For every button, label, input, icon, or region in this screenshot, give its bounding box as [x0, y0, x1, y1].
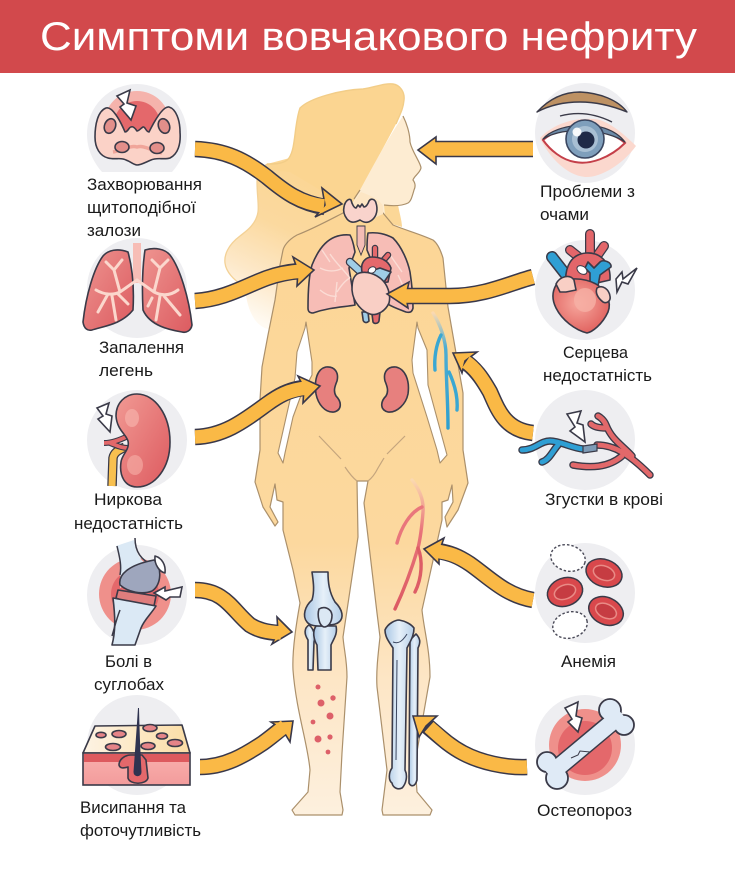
- arrow: to lungs: [195, 257, 314, 301]
- icon: lungs: [83, 238, 192, 338]
- torso, arms and legs: [255, 212, 468, 815]
- light flowing hair: [225, 150, 362, 329]
- label: blood clots: Згустки в крові: [545, 491, 663, 509]
- arrow: to thyroid: [195, 149, 342, 217]
- label: lung inflammation: легень: [99, 362, 153, 380]
- face: [345, 116, 421, 216]
- label: eye problems: Проблеми з: [540, 183, 635, 201]
- hair behind the neck: [384, 205, 402, 227]
- arrow: to arm vein: [453, 352, 533, 433]
- icon: thyroid disease: [87, 84, 187, 172]
- label: rash and photosensitivity: Висипання та: [80, 799, 187, 817]
- label: joint pain: суглобах: [94, 676, 165, 694]
- arrow: to heart: [387, 277, 533, 308]
- arrow: to knee: [195, 590, 292, 644]
- icon: anemia: [535, 541, 635, 643]
- organ: kidneys: [315, 367, 408, 412]
- label: thyroid disease: [87, 176, 202, 240]
- organ: trachea: [357, 226, 365, 255]
- label: thyroid disease: Захворювання: [87, 176, 202, 194]
- central body figure: [225, 84, 468, 815]
- label: eye problems: очами: [540, 206, 589, 224]
- label: osteoporosis: Остеопороз: [537, 802, 632, 820]
- bones: knee: [305, 572, 342, 670]
- label: rash and photosensitivity: [80, 799, 201, 840]
- icon: osteoporosis: [535, 695, 635, 795]
- label: rash and photosensitivity: фоточутливість: [80, 822, 201, 840]
- organ: heart: [350, 248, 391, 323]
- label: kidney failure: недостатність: [74, 515, 183, 533]
- neck cover: [346, 192, 383, 220]
- label: heart failure: Серцева: [563, 344, 629, 362]
- rash spots: [311, 684, 336, 754]
- icon: rash and photosensitivity: [83, 695, 190, 795]
- arrow: to kidney: [195, 376, 320, 437]
- hip and groin lines: [319, 436, 405, 481]
- gap right of torso: [412, 322, 447, 463]
- label: lung inflammation: Запалення: [99, 339, 184, 357]
- label: heart failure: недостатність: [543, 367, 652, 385]
- label: lung inflammation: [99, 339, 184, 380]
- label: kidney failure: [74, 491, 183, 533]
- label: eye problems: [540, 183, 635, 224]
- icon: eye: [535, 83, 636, 183]
- label: heart failure: [543, 344, 652, 385]
- gap left of torso: [278, 322, 312, 463]
- label: thyroid disease: залози: [87, 222, 141, 240]
- arrow: to eye: [418, 137, 533, 164]
- label: thyroid disease: щитоподібної: [87, 199, 196, 217]
- organ: lungs: [308, 233, 413, 313]
- arrow: to rash: [200, 721, 293, 767]
- arrow: to leg vein: [424, 538, 533, 600]
- icon: kidney: [87, 390, 187, 490]
- label: joint pain: Болі в: [105, 653, 152, 671]
- label: kidney failure: Ниркова: [94, 491, 163, 509]
- veins: red leg: [395, 480, 423, 609]
- title banner: [0, 0, 735, 73]
- arrow: to shin: [413, 716, 527, 767]
- veins: blue arm: [433, 313, 457, 428]
- organ: thyroid: [344, 199, 377, 222]
- title banner: Симптоми вовчакового нефриту: [40, 15, 697, 59]
- label: joint pain: [94, 653, 165, 694]
- icon: blood clots: [522, 390, 650, 490]
- bones: shin: [385, 620, 420, 789]
- dark upper hair: [267, 84, 404, 215]
- label: anemia: Анемія: [561, 653, 616, 671]
- icon: heart failure: [535, 234, 637, 340]
- icon: joint pain: [87, 538, 187, 645]
